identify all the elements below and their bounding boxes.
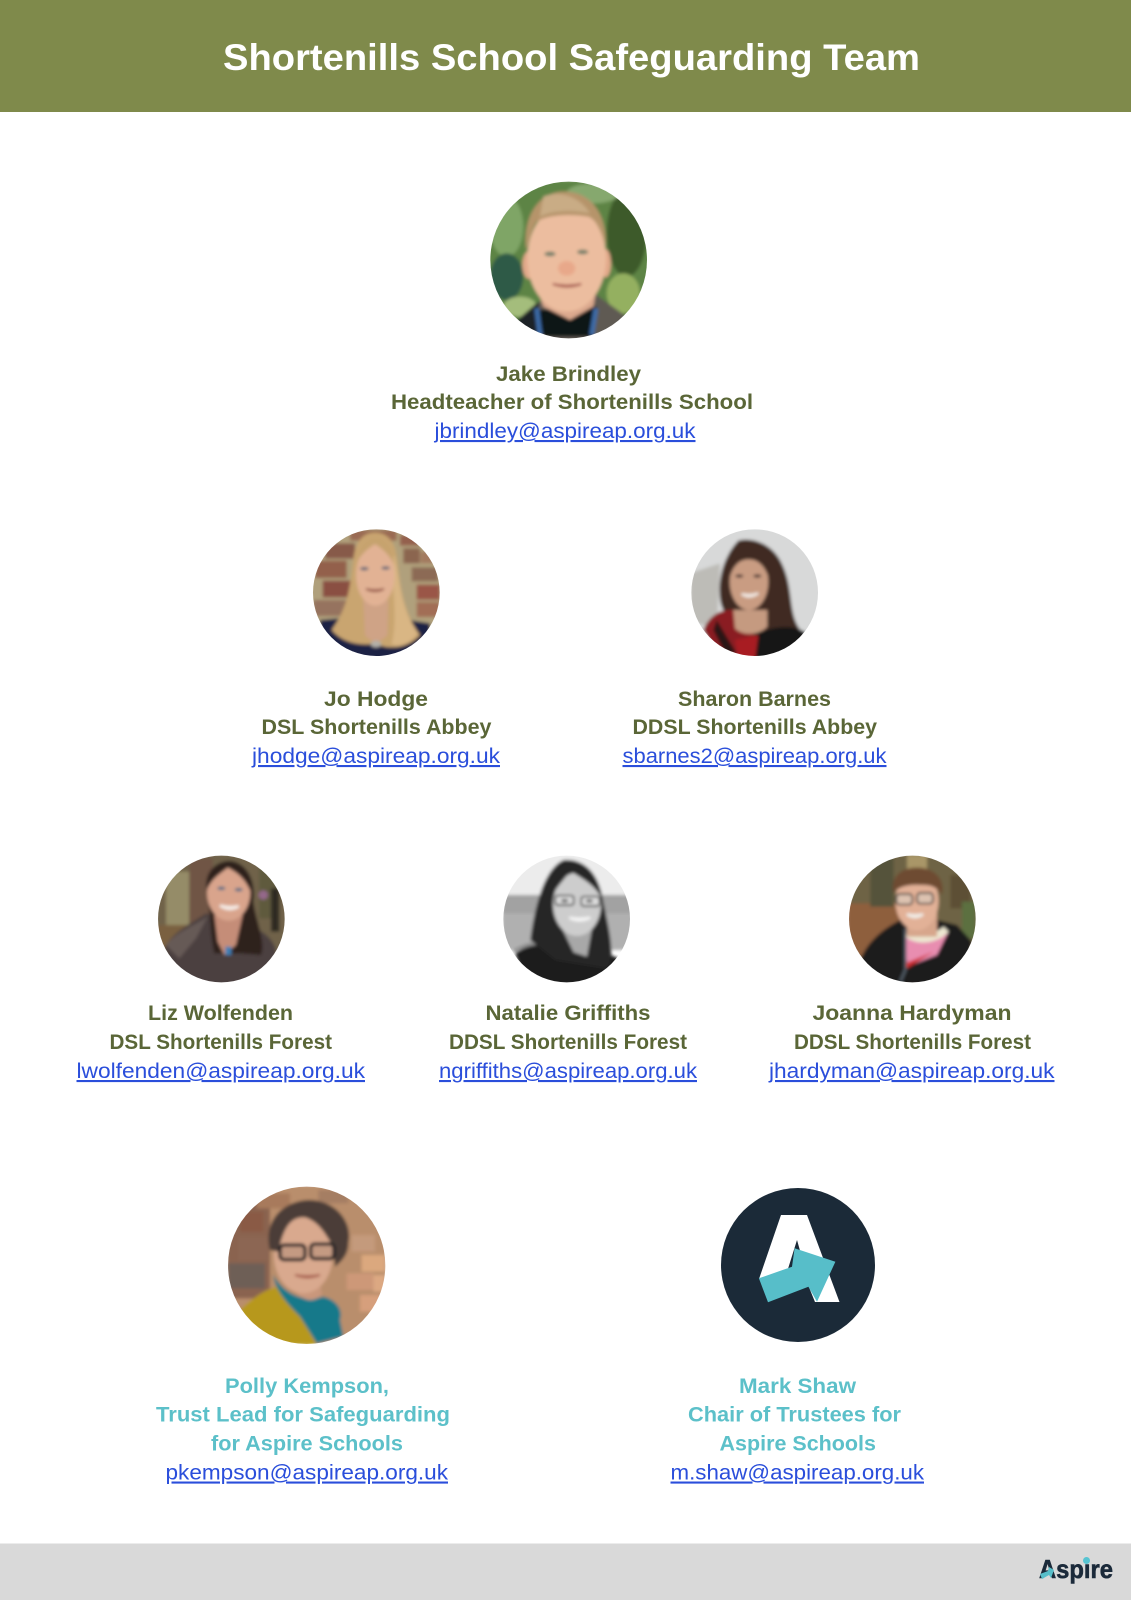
email link: lwolfenden@aspireap.org.uk	[76, 1060, 366, 1083]
name and role	[156, 1375, 450, 1456]
card: Natalie Griffiths	[439, 853, 698, 1083]
name and role: Mark Shaw	[739, 1375, 857, 1398]
card: Sharon Barnes	[622, 527, 887, 768]
photo: Joanna Hardyman	[847, 853, 980, 987]
name and role	[632, 688, 877, 739]
photo: Liz Wolfenden	[156, 853, 289, 987]
name and role: Polly Kempson,	[225, 1375, 389, 1398]
name and role: Sharon Barnes	[678, 688, 831, 711]
name and role: Headteacher of Shortenills School	[391, 391, 753, 414]
card: Joanna Hardyman	[768, 853, 1055, 1083]
name and role: Liz Wolfenden	[148, 1002, 293, 1025]
name and role	[688, 1375, 901, 1456]
photo: Jo Hodge	[310, 527, 443, 660]
name and role: Aspire Schools	[720, 1432, 876, 1456]
email link: m.shaw@aspireap.org.uk	[670, 1462, 925, 1484]
name and role: Jake Brindley	[496, 363, 641, 386]
name and role	[391, 363, 753, 414]
photo: Sharon Barnes	[690, 527, 823, 660]
name and role	[794, 1002, 1031, 1054]
card: Jo Hodge	[251, 527, 501, 768]
card: Mark Shaw	[670, 1188, 925, 1484]
name and role	[449, 1002, 687, 1054]
name and role: for Aspire Schools	[211, 1432, 403, 1456]
photo: Natalie Griffiths	[502, 853, 635, 985]
card: Liz Wolfenden	[76, 853, 366, 1083]
email link: jhardyman@aspireap.org.uk	[768, 1060, 1055, 1083]
name and role: DDSL Shortenills Forest	[794, 1031, 1031, 1054]
email link: jbrindley@aspireap.org.uk	[433, 420, 696, 443]
name and role: DSL Shortenills Abbey	[262, 716, 492, 739]
email link: jhodge@aspireap.org.uk	[251, 745, 501, 768]
name and role: Trust Lead for Safeguarding	[156, 1404, 450, 1426]
name and role	[262, 688, 492, 739]
card: Jake Brindley	[391, 180, 753, 443]
name and role	[110, 1002, 332, 1054]
header banner	[0, 0, 1131, 112]
photo: Jake Brindley	[487, 180, 650, 347]
name and role: DDSL Shortenills Forest	[449, 1031, 687, 1054]
name and role: Joanna Hardyman	[812, 1002, 1012, 1025]
card: Polly Kempson	[156, 1185, 450, 1484]
email link: sbarnes2@aspireap.org.uk	[622, 745, 887, 768]
title: Shortenills School Safeguarding Team	[223, 36, 920, 78]
email link: pkempson@aspireap.org.uk	[166, 1462, 449, 1484]
name and role: Chair of Trustees for	[688, 1404, 901, 1426]
icon: Aspire logo badge	[721, 1188, 875, 1342]
name and role: Jo Hodge	[324, 688, 428, 711]
name and role: Natalie Griffiths	[486, 1002, 650, 1025]
photo: Polly Kempson	[227, 1185, 387, 1345]
footer band	[0, 1544, 1131, 1600]
footer logo: Aspire: Aspire	[1039, 1554, 1113, 1584]
name and role: DDSL Shortenills Abbey	[632, 716, 877, 739]
name and role: DSL Shortenills Forest	[110, 1031, 332, 1054]
email link: ngriffiths@aspireap.org.uk	[439, 1060, 698, 1083]
